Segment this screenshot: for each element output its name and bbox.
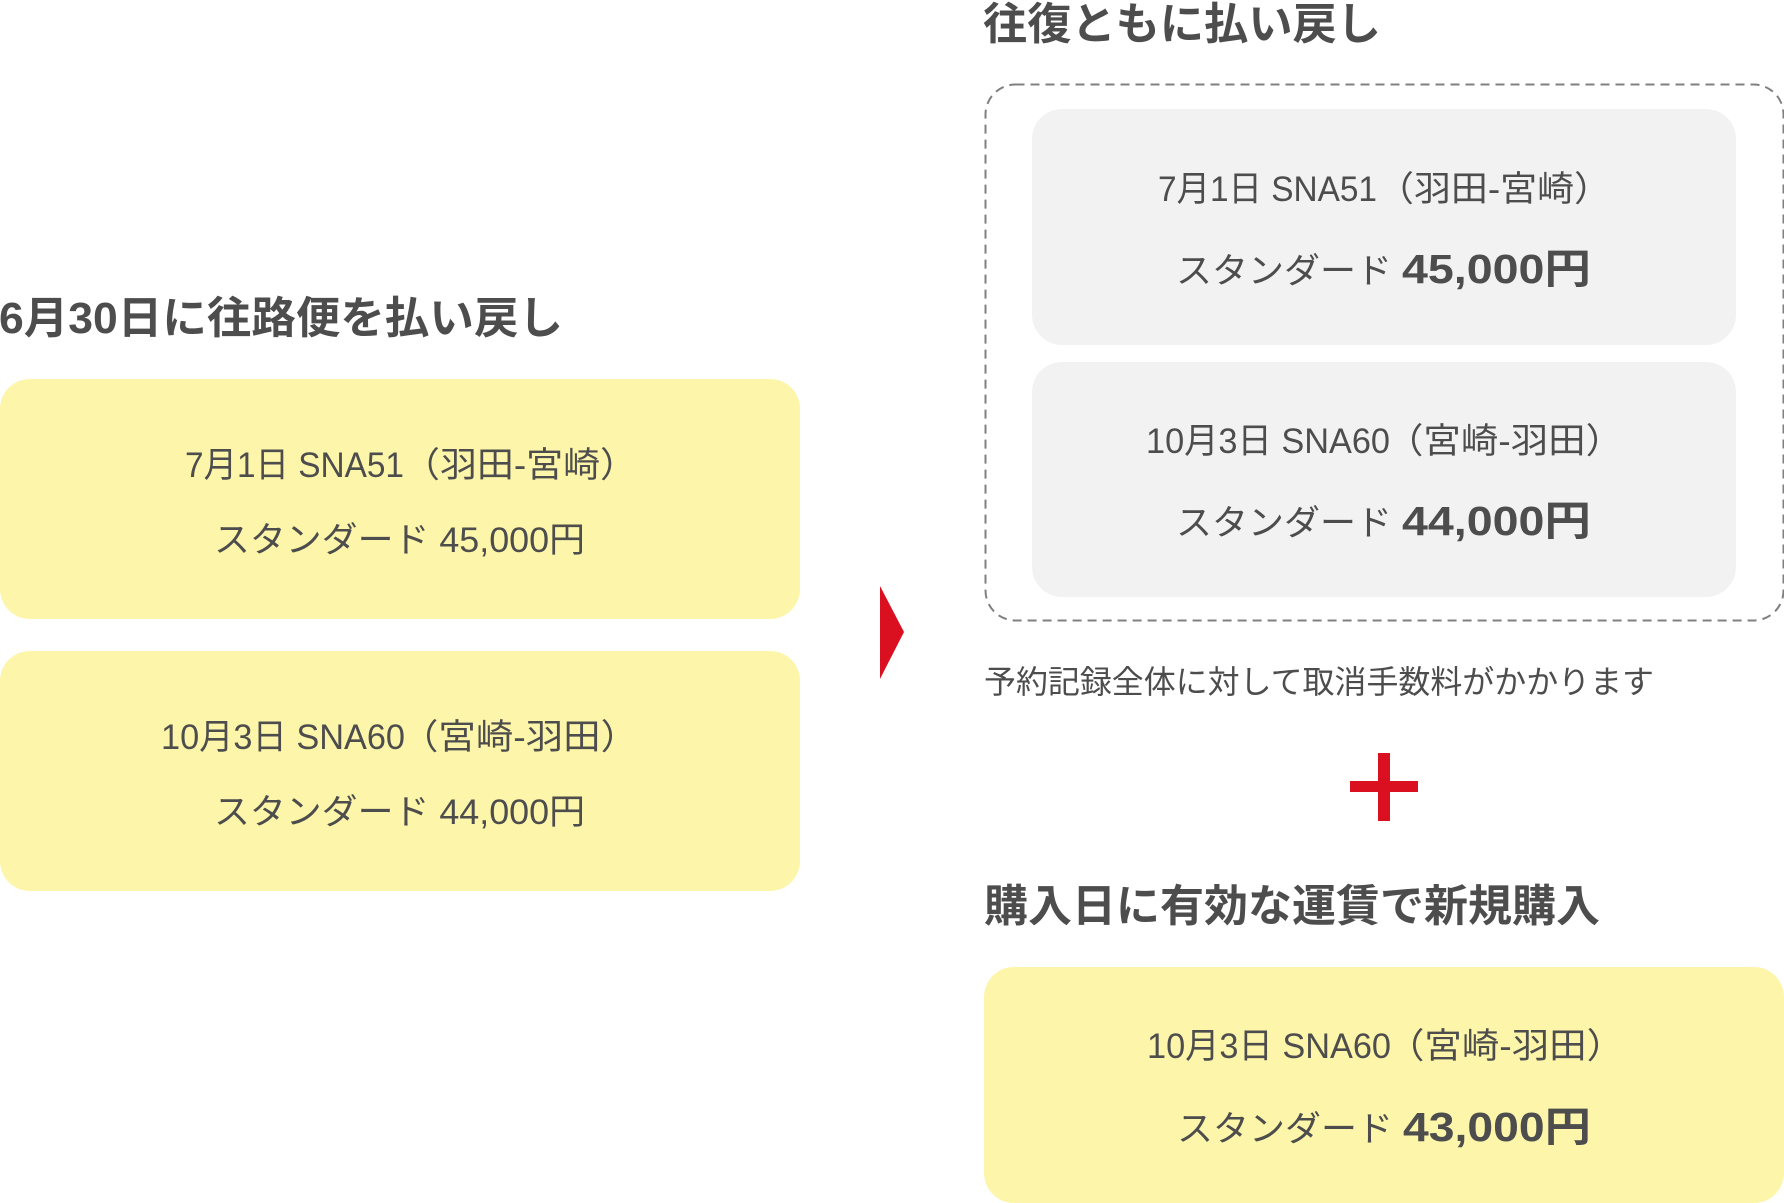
heading: outbound refund on June 30: 6月30日に往路便を払い戻し (0, 294, 563, 343)
panel: newly purchased return ticket: スタンダード (1177, 1110, 1393, 1149)
card: refunded return ticket: 44,000円 (1402, 498, 1591, 544)
note: cancellation fee: 予約記録全体に対して取消手数料がかかります (984, 664, 1654, 700)
card: refunded outbound ticket: （羽田-宮崎） (1377, 170, 1611, 209)
card: refunded outbound ticket: 45,000円 (1402, 246, 1591, 292)
card: refunded return ticket: 10月3日 SNA60 (1146, 422, 1390, 461)
panel: original outbound ticket: 7月1日 SNA51 (185, 446, 404, 485)
panel: original return ticket: スタンダード 44,000円 (214, 793, 585, 832)
panel: original outbound ticket (0, 379, 800, 619)
panel: dashed group of refunded tickets (986, 84, 1784, 620)
heading: refund both ways: 往復ともに払い戻し (983, 0, 1381, 49)
panel: newly purchased return ticket: 10月3日 SNA60 (1147, 1027, 1391, 1066)
heading: new purchase at fare valid on purchase date: 購入日に有効な運賃で新規購入 (984, 882, 1600, 931)
arrow: red pointer to the right (880, 586, 904, 679)
card: refunded return ticket: スタンダード (1176, 504, 1392, 543)
panel: original return ticket (0, 651, 800, 891)
panel: original return ticket: （宮崎-羽田） (401, 718, 638, 757)
card: refunded outbound ticket (1032, 109, 1736, 345)
card: refunded return ticket: （宮崎-羽田） (1386, 422, 1623, 461)
panel: original outbound ticket: （羽田-宮崎） (403, 446, 637, 485)
card: refunded return ticket (1032, 362, 1736, 597)
panel: newly purchased return ticket (984, 967, 1784, 1203)
icon: red plus sign (1350, 753, 1418, 821)
panel: newly purchased return ticket: （宮崎-羽田） (1387, 1027, 1624, 1066)
panel: original outbound ticket: スタンダード 45,000円 (214, 521, 585, 560)
panel: original return ticket: 10月3日 SNA60 (161, 718, 405, 757)
panel: newly purchased return ticket: 43,000円 (1403, 1104, 1591, 1150)
card: refunded outbound ticket: 7月1日 SNA51 (1158, 170, 1377, 209)
card: refunded outbound ticket: スタンダード (1176, 252, 1392, 291)
